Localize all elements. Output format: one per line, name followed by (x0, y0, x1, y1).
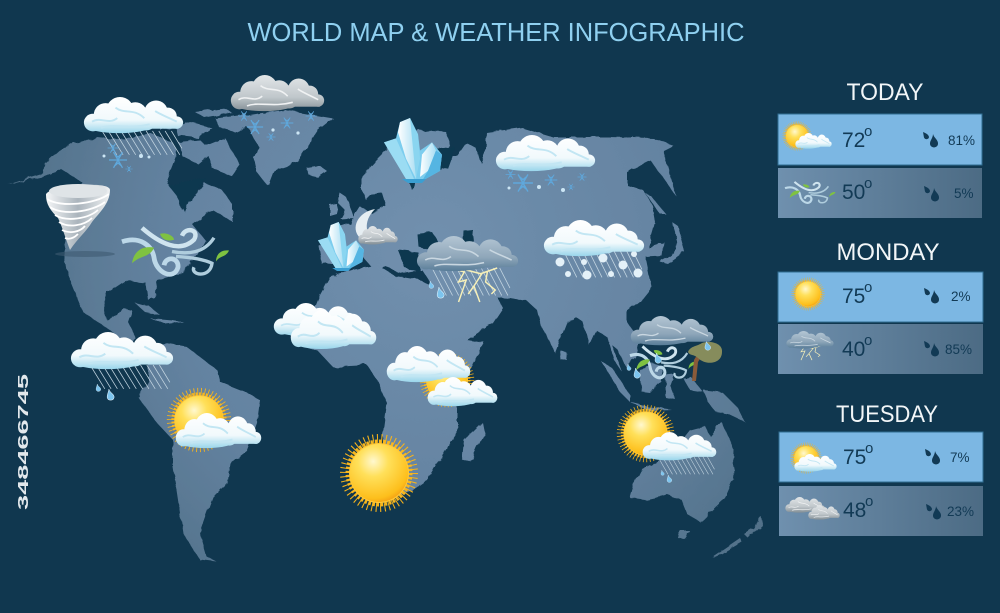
panel: monday night (778, 324, 983, 374)
icon: tornado (46, 184, 115, 257)
Africa (285, 265, 485, 497)
degree sign: o (864, 175, 872, 192)
humidity: 7% (950, 450, 970, 465)
icon: sun and clouds, East Africa (387, 346, 497, 406)
humidity: 2% (951, 289, 971, 304)
heading: MONDAY: MONDAY (836, 239, 940, 266)
icon: sun and cloud (784, 123, 832, 149)
humidity: 85% (945, 342, 972, 357)
temperature: 50 (842, 181, 865, 204)
humidity: 5% (954, 186, 974, 201)
icon: sun and cloud, Brazil (171, 392, 261, 448)
icon: ice crystal, Scandinavia (384, 118, 442, 183)
icon: drops (926, 504, 941, 519)
icon: large sun, South Africa (345, 439, 413, 507)
panel: today night (778, 168, 982, 218)
Greenland (240, 110, 333, 185)
panel: tuesday day (779, 432, 983, 482)
icon: drops (924, 186, 939, 201)
Australia (630, 422, 734, 522)
icon: sun and cloud (792, 444, 837, 472)
degree sign: o (864, 279, 872, 296)
inland seas (168, 146, 474, 272)
icon: drops (924, 288, 939, 303)
degree sign: o (865, 493, 873, 510)
temperature: 40 (842, 338, 865, 361)
icon: storm with wind and tree, Southeast Asia (627, 316, 722, 381)
temperature: 48 (843, 499, 866, 522)
temperature: 75 (842, 285, 865, 308)
heading: TODAY: TODAY (846, 79, 924, 106)
icon: clouds, North Africa (274, 303, 376, 349)
Sri Lanka (561, 351, 567, 361)
Iceland (307, 166, 327, 177)
icon: grey clouds (785, 497, 840, 520)
world map (8, 108, 762, 562)
icon: wind with leaves (122, 228, 229, 274)
temperature: 75 (843, 446, 866, 469)
Madagascar (462, 422, 484, 462)
icon: sun (794, 280, 822, 308)
title: WORLD MAP & WEATHER INFOGRAPHIC (248, 17, 744, 47)
degree sign: o (864, 123, 872, 140)
icon: thunderstorm, Middle East (417, 236, 518, 302)
icon: wind (785, 182, 835, 203)
Caribbean (135, 303, 184, 324)
heading: TUESDAY: TUESDAY (836, 401, 938, 428)
North America (8, 133, 233, 345)
Japan and Sakhalin (645, 193, 685, 264)
panel: tuesday night (779, 486, 983, 536)
temperature: 72 (842, 129, 865, 152)
humidity: 81% (948, 133, 975, 148)
panel: monday day (778, 272, 983, 322)
icon: drops (925, 449, 940, 464)
Eurasia (319, 128, 677, 372)
UK and Ireland (330, 193, 354, 219)
icon: hail cloud, China (544, 220, 644, 280)
icon: drops (923, 132, 938, 147)
New Zealand (712, 515, 762, 557)
Arctic islands (160, 108, 252, 176)
icon: rain cloud, Central America (71, 332, 173, 400)
icon: grey snow cloud, Greenland (231, 75, 324, 141)
icon: snowy rain cloud, Canada (84, 97, 183, 172)
icon: snow cloud, Siberia (496, 135, 595, 192)
panel: today day (778, 114, 982, 165)
icon: ice crystal, Iberia (318, 222, 364, 271)
South America (138, 343, 260, 562)
icon: storm cloud (786, 331, 834, 360)
degree sign: o (865, 440, 873, 457)
Tasmania (678, 530, 690, 539)
New Guinea (703, 390, 745, 422)
Indonesia and Philippines (602, 362, 703, 411)
icon: moon and cloud (356, 209, 398, 245)
vertical image id: 348466745 (15, 374, 32, 510)
degree sign: o (864, 332, 872, 349)
icon: sun, cloud and rain, Australia (620, 408, 716, 482)
humidity: 23% (947, 504, 974, 519)
icon: drops (924, 341, 939, 356)
